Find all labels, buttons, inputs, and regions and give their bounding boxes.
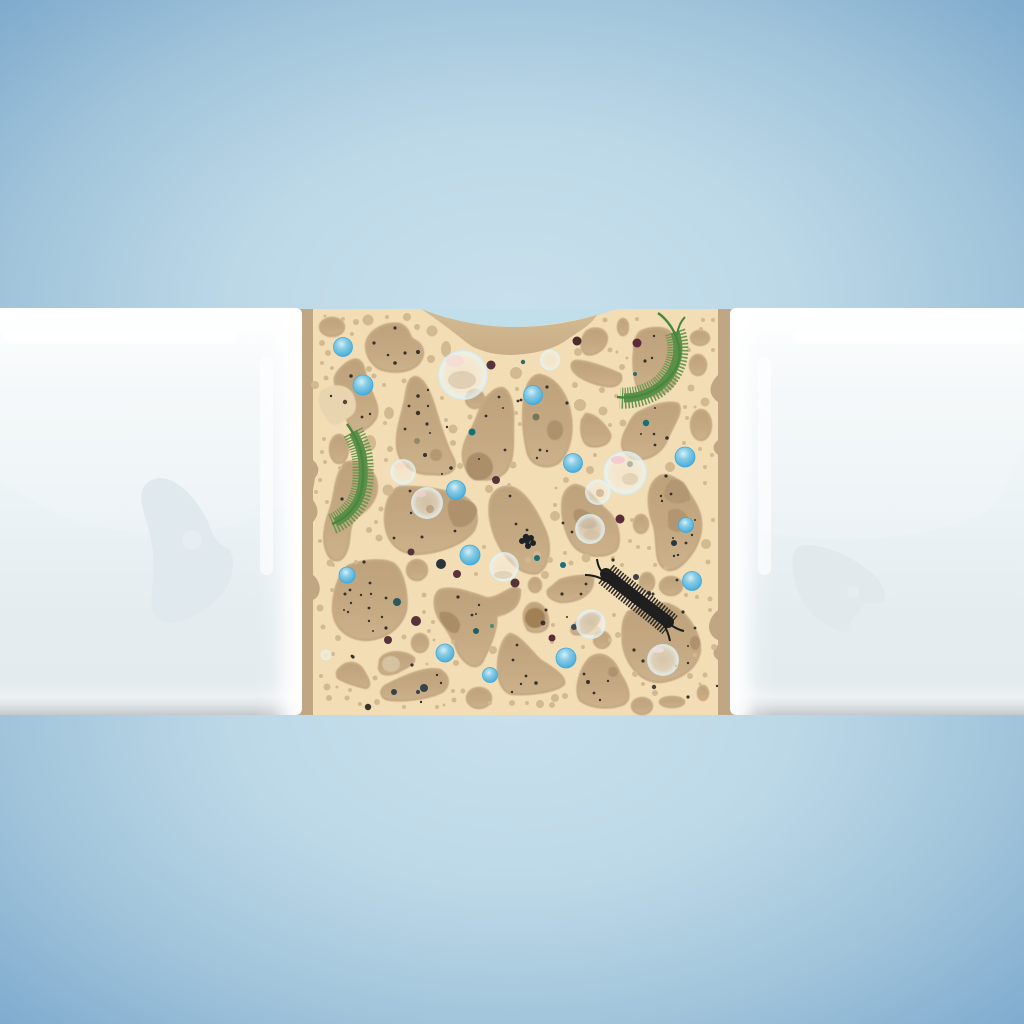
background: lower sky gradient: [0, 712, 1024, 1024]
translucent air bubbles: [320, 350, 679, 676]
air bubble 3: [411, 487, 443, 519]
blue bubble 5: [675, 447, 695, 467]
fern: green seaweed, left: [332, 424, 363, 524]
blue bubble 2: [353, 375, 373, 395]
left white block: [0, 308, 302, 715]
air bubble 4: [540, 350, 560, 370]
air bubble 1: [438, 350, 488, 400]
right tan edge strip: [709, 309, 736, 715]
blue bubble 7: [678, 518, 694, 532]
air bubble 2: [390, 459, 416, 485]
sunken top surface of the sand: [420, 309, 620, 355]
blue bubble 3: [524, 386, 542, 404]
air bubble 5: [603, 451, 647, 495]
lighter and darker pore patches: [319, 385, 700, 677]
air bubble 6: [585, 479, 611, 505]
blue bubble 4: [564, 454, 582, 472]
blue bubble 9: [339, 567, 355, 583]
fern: green seaweed, upper right: [617, 313, 685, 398]
dark specks and debris clusters: [330, 326, 718, 710]
blue water bubbles: [334, 338, 702, 682]
large sand pores: [320, 318, 711, 714]
small tan sand grains: [311, 313, 717, 709]
blue bubble 1: [334, 338, 352, 356]
air bubble 11: [320, 650, 332, 660]
blue bubble 6: [446, 480, 466, 500]
millipede: dark bristle worm: [585, 559, 684, 641]
air bubble 10: [647, 644, 679, 676]
left tan edge strip: [296, 309, 320, 715]
background: upper sky gradient: [0, 0, 1024, 312]
maroon and teal debris specks: [384, 336, 677, 695]
air bubble 7: [575, 514, 605, 544]
air bubble 9: [576, 609, 606, 639]
air bubble 8: [489, 552, 519, 582]
blue bubble 11: [436, 644, 454, 662]
blue bubble 12: [556, 648, 576, 668]
sand column base: [298, 309, 734, 715]
blue bubble 13: [482, 668, 498, 682]
right white block: [730, 308, 1024, 715]
blue bubble 8: [460, 545, 480, 565]
blue bubble 10: [682, 572, 702, 590]
